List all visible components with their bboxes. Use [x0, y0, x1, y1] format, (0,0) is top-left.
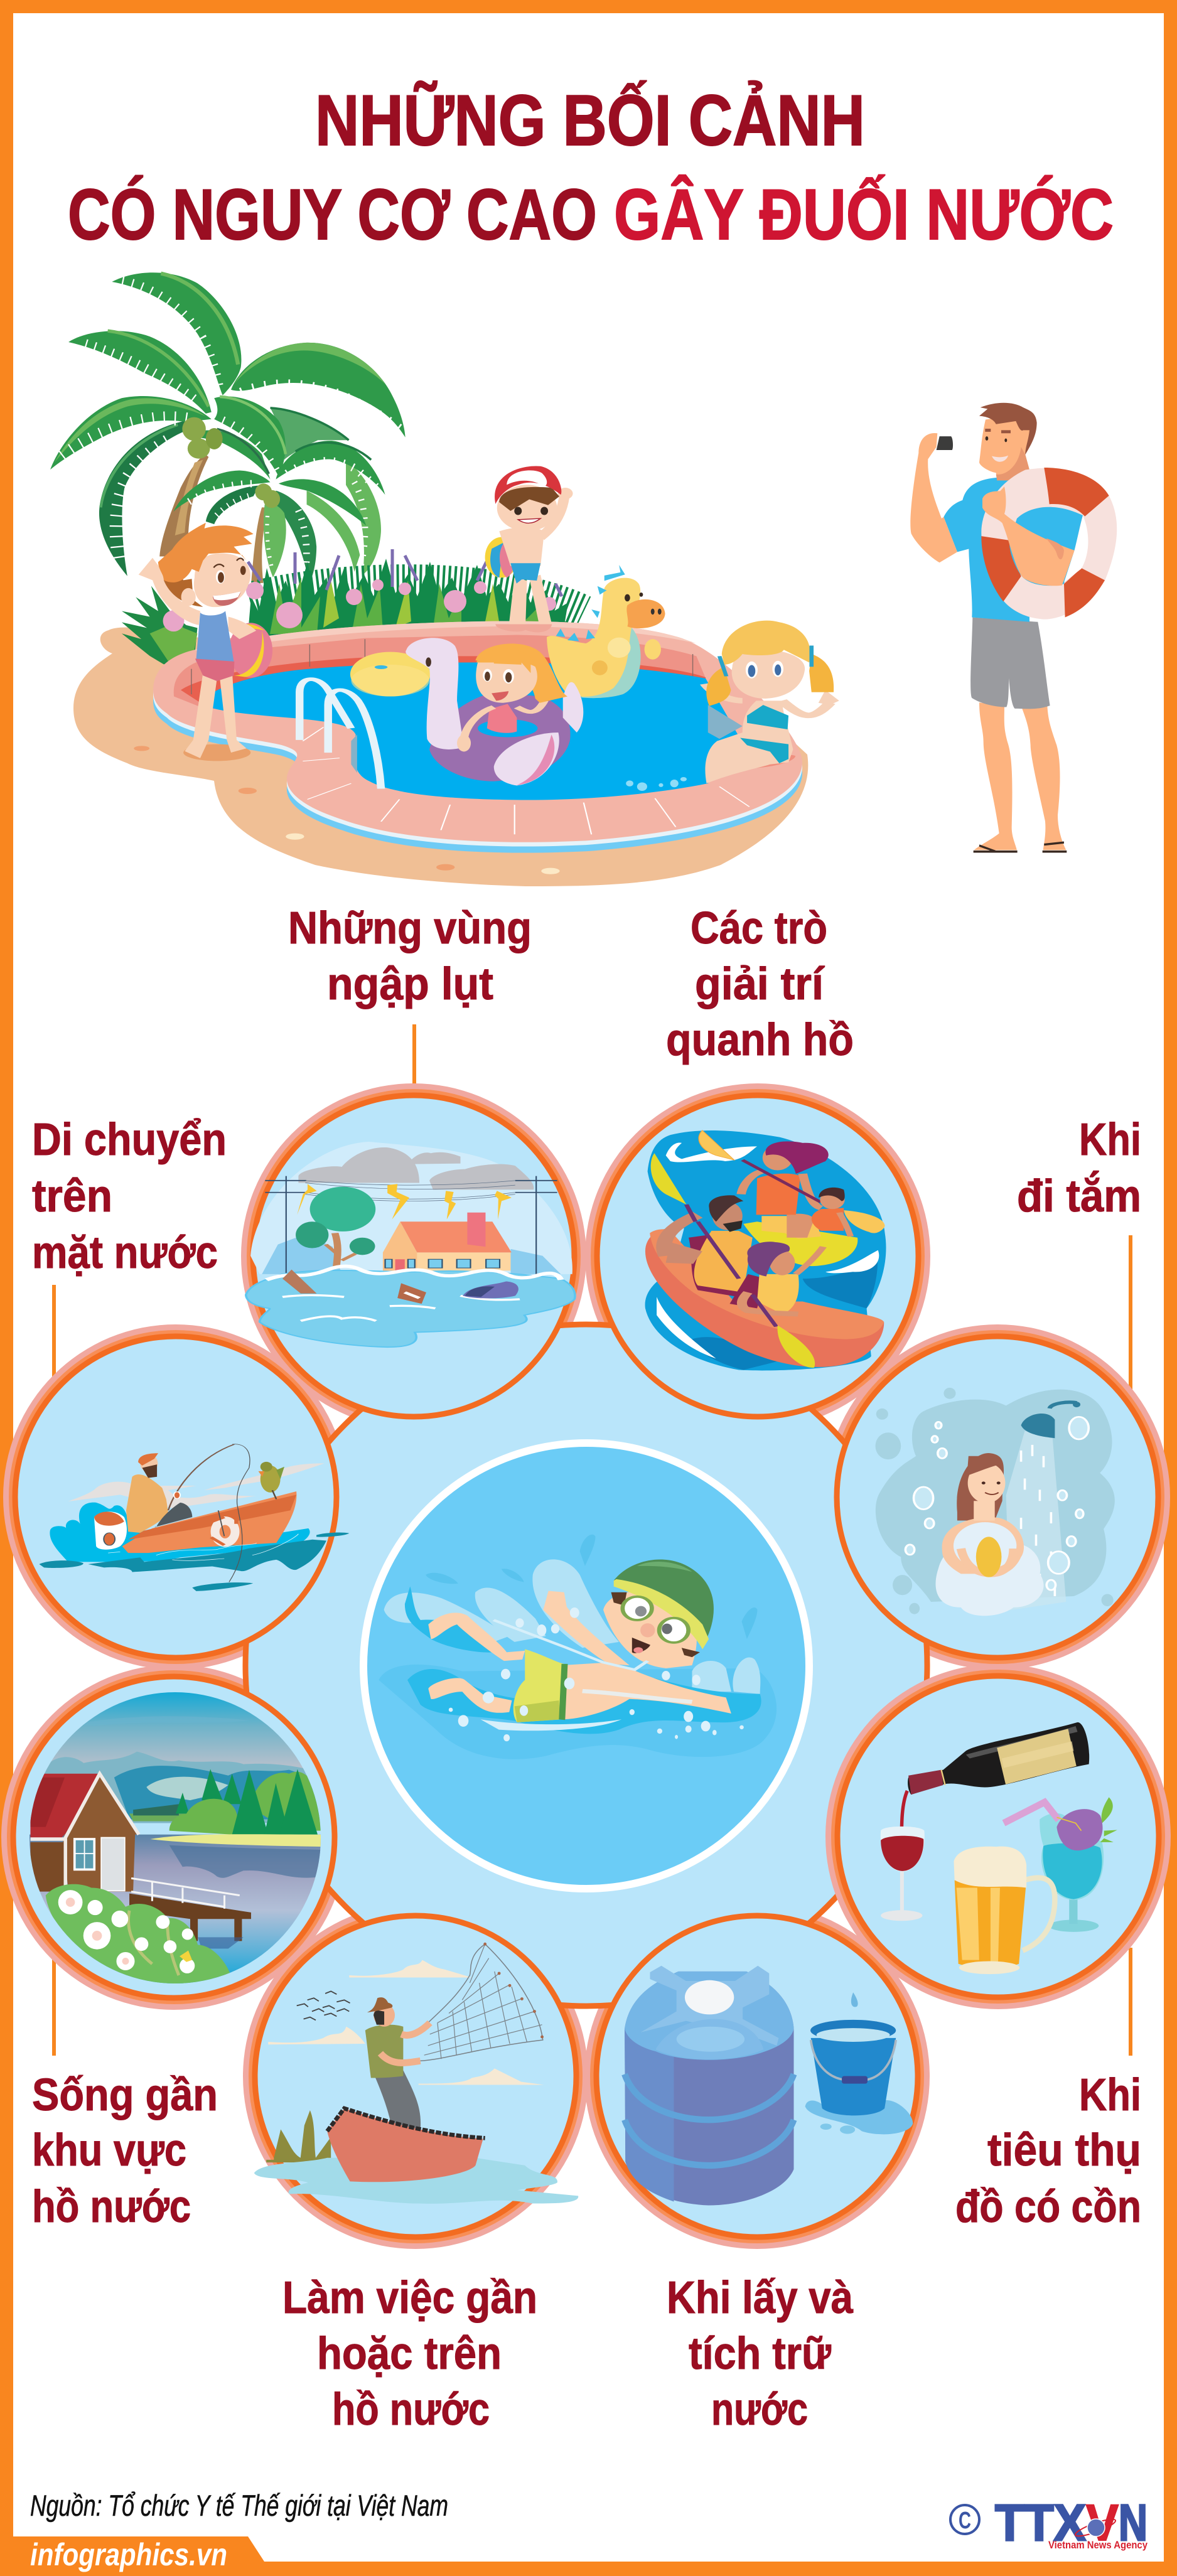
- logo: TTXVN Vietnam News Agency: [950, 2494, 1147, 2552]
- label: làm việc gần hoặc trên hồ nước: [282, 2273, 537, 2435]
- label: khi lấy và tích trữ nước: [667, 2273, 854, 2435]
- title: [68, 81, 1114, 255]
- label: di chuyển trên mặt nước: mặt nước: [32, 1228, 218, 1278]
- panel: man fishing on a boat: [15, 1336, 349, 1658]
- logo: TTXVN Vietnam News Agency: N: [1119, 2494, 1147, 2552]
- label: những vùng ngập lụt: Những vùng: [288, 903, 532, 953]
- footer tab with website: infographics.vn: [30, 2537, 227, 2572]
- label: di chuyển trên mặt nước: [32, 1115, 227, 1278]
- label: khi đi tắm: đi tắm: [1017, 1171, 1141, 1221]
- label: khi tiêu thụ đồ có cồn: Khi: [1079, 2070, 1141, 2120]
- title: NHỮNG BỐI CẢNH: [315, 81, 865, 161]
- central circle: swimming child: [363, 1443, 809, 1889]
- label: làm việc gần hoặc trên hồ nước: Làm việc gần: [282, 2273, 537, 2323]
- label: khi lấy và tích trữ nước: Khi lấy và: [667, 2273, 854, 2323]
- illustration: girl sitting on pool edge: [705, 621, 839, 783]
- label: các trò giải trí quanh hồ: giải trí: [695, 959, 825, 1009]
- panel: woman in shower: [837, 1336, 1158, 1658]
- label: các trò giải trí quanh hồ: [666, 903, 854, 1065]
- illustration: lifeguard man with lifebuoy: [910, 403, 1117, 852]
- label: di chuyển trên mặt nước: Di chuyển: [32, 1115, 227, 1165]
- panel: wine, beer and cocktail: [825, 1664, 1171, 2009]
- label: khi tiêu thụ đồ có cồn: đồ có cồn: [955, 2182, 1141, 2232]
- illustration: sand around pool: [73, 628, 808, 886]
- label: khi tiêu thụ đồ có cồn: [955, 2070, 1141, 2232]
- illustration: palm trees: [50, 272, 406, 583]
- logo: TTXVN Vietnam News Agency: Vietnam News Agency: [1048, 2539, 1147, 2551]
- logo: TTXVN Vietnam News Agency: V: [1086, 2494, 1119, 2552]
- label: sống gần khu vực hồ nước: [32, 2070, 218, 2232]
- label: khi lấy và tích trữ nước: nước: [711, 2385, 808, 2435]
- illustration: boy in blue trunks on rim: [485, 466, 573, 632]
- label: khi đi tắm: [1017, 1115, 1141, 1221]
- label: những vùng ngập lụt: ngập lụt: [327, 959, 493, 1009]
- logo: TTXVN Vietnam News Agency: TTX: [995, 2494, 1086, 2552]
- label: di chuyển trên mặt nước: trên: [32, 1171, 112, 1221]
- outer pink and light orange rings: [1, 1083, 1170, 2249]
- label: các trò giải trí quanh hồ: quanh hồ: [666, 1015, 854, 1065]
- label: sống gần khu vực hồ nước: Sống gần: [32, 2070, 218, 2120]
- logo: TTXVN Vietnam News Agency: C: [959, 2508, 971, 2534]
- connector lines from labels to circles: [54, 1024, 1131, 2056]
- panel: family kayaking: [597, 1095, 918, 1417]
- label: sống gần khu vực hồ nước: khu vực: [32, 2125, 186, 2176]
- label: làm việc gần hoặc trên hồ nước: hồ nước: [332, 2385, 490, 2435]
- label: các trò giải trí quanh hồ: Các trò: [691, 903, 827, 953]
- label: làm việc gần hoặc trên hồ nước: hoặc trên: [317, 2329, 502, 2379]
- illustration: swan float with girl: [406, 638, 583, 786]
- title: CÓ NGUY CƠ CAO: [68, 175, 597, 255]
- label: khi tiêu thụ đồ có cồn: tiêu thụ: [987, 2125, 1141, 2176]
- illustration: shrubs and flowers: [122, 549, 587, 664]
- illustration: swimming pool: [134, 621, 802, 874]
- panel: lakeside house: [13, 1677, 335, 1998]
- panel: water tank and bucket: [596, 1916, 918, 2237]
- illustration: boy waving with beach ball: [139, 523, 272, 761]
- panel: man casting net from boat: [254, 1916, 578, 2237]
- illustration: inflatable dragon and yellow ring: [350, 565, 665, 698]
- label: khi đi tắm: Khi: [1079, 1115, 1141, 1165]
- source note: Nguồn: Tổ chức Y tế Thế giới tại Việt Nam: [30, 2489, 448, 2522]
- large central pale blue disk: [245, 1324, 927, 2006]
- label: sống gần khu vực hồ nước: hồ nước: [32, 2182, 191, 2232]
- label: khi lấy và tích trữ nước: tích trữ: [689, 2329, 832, 2379]
- panel: flooded area: [246, 1095, 575, 1417]
- label: những vùng ngập lụt: [288, 903, 532, 1009]
